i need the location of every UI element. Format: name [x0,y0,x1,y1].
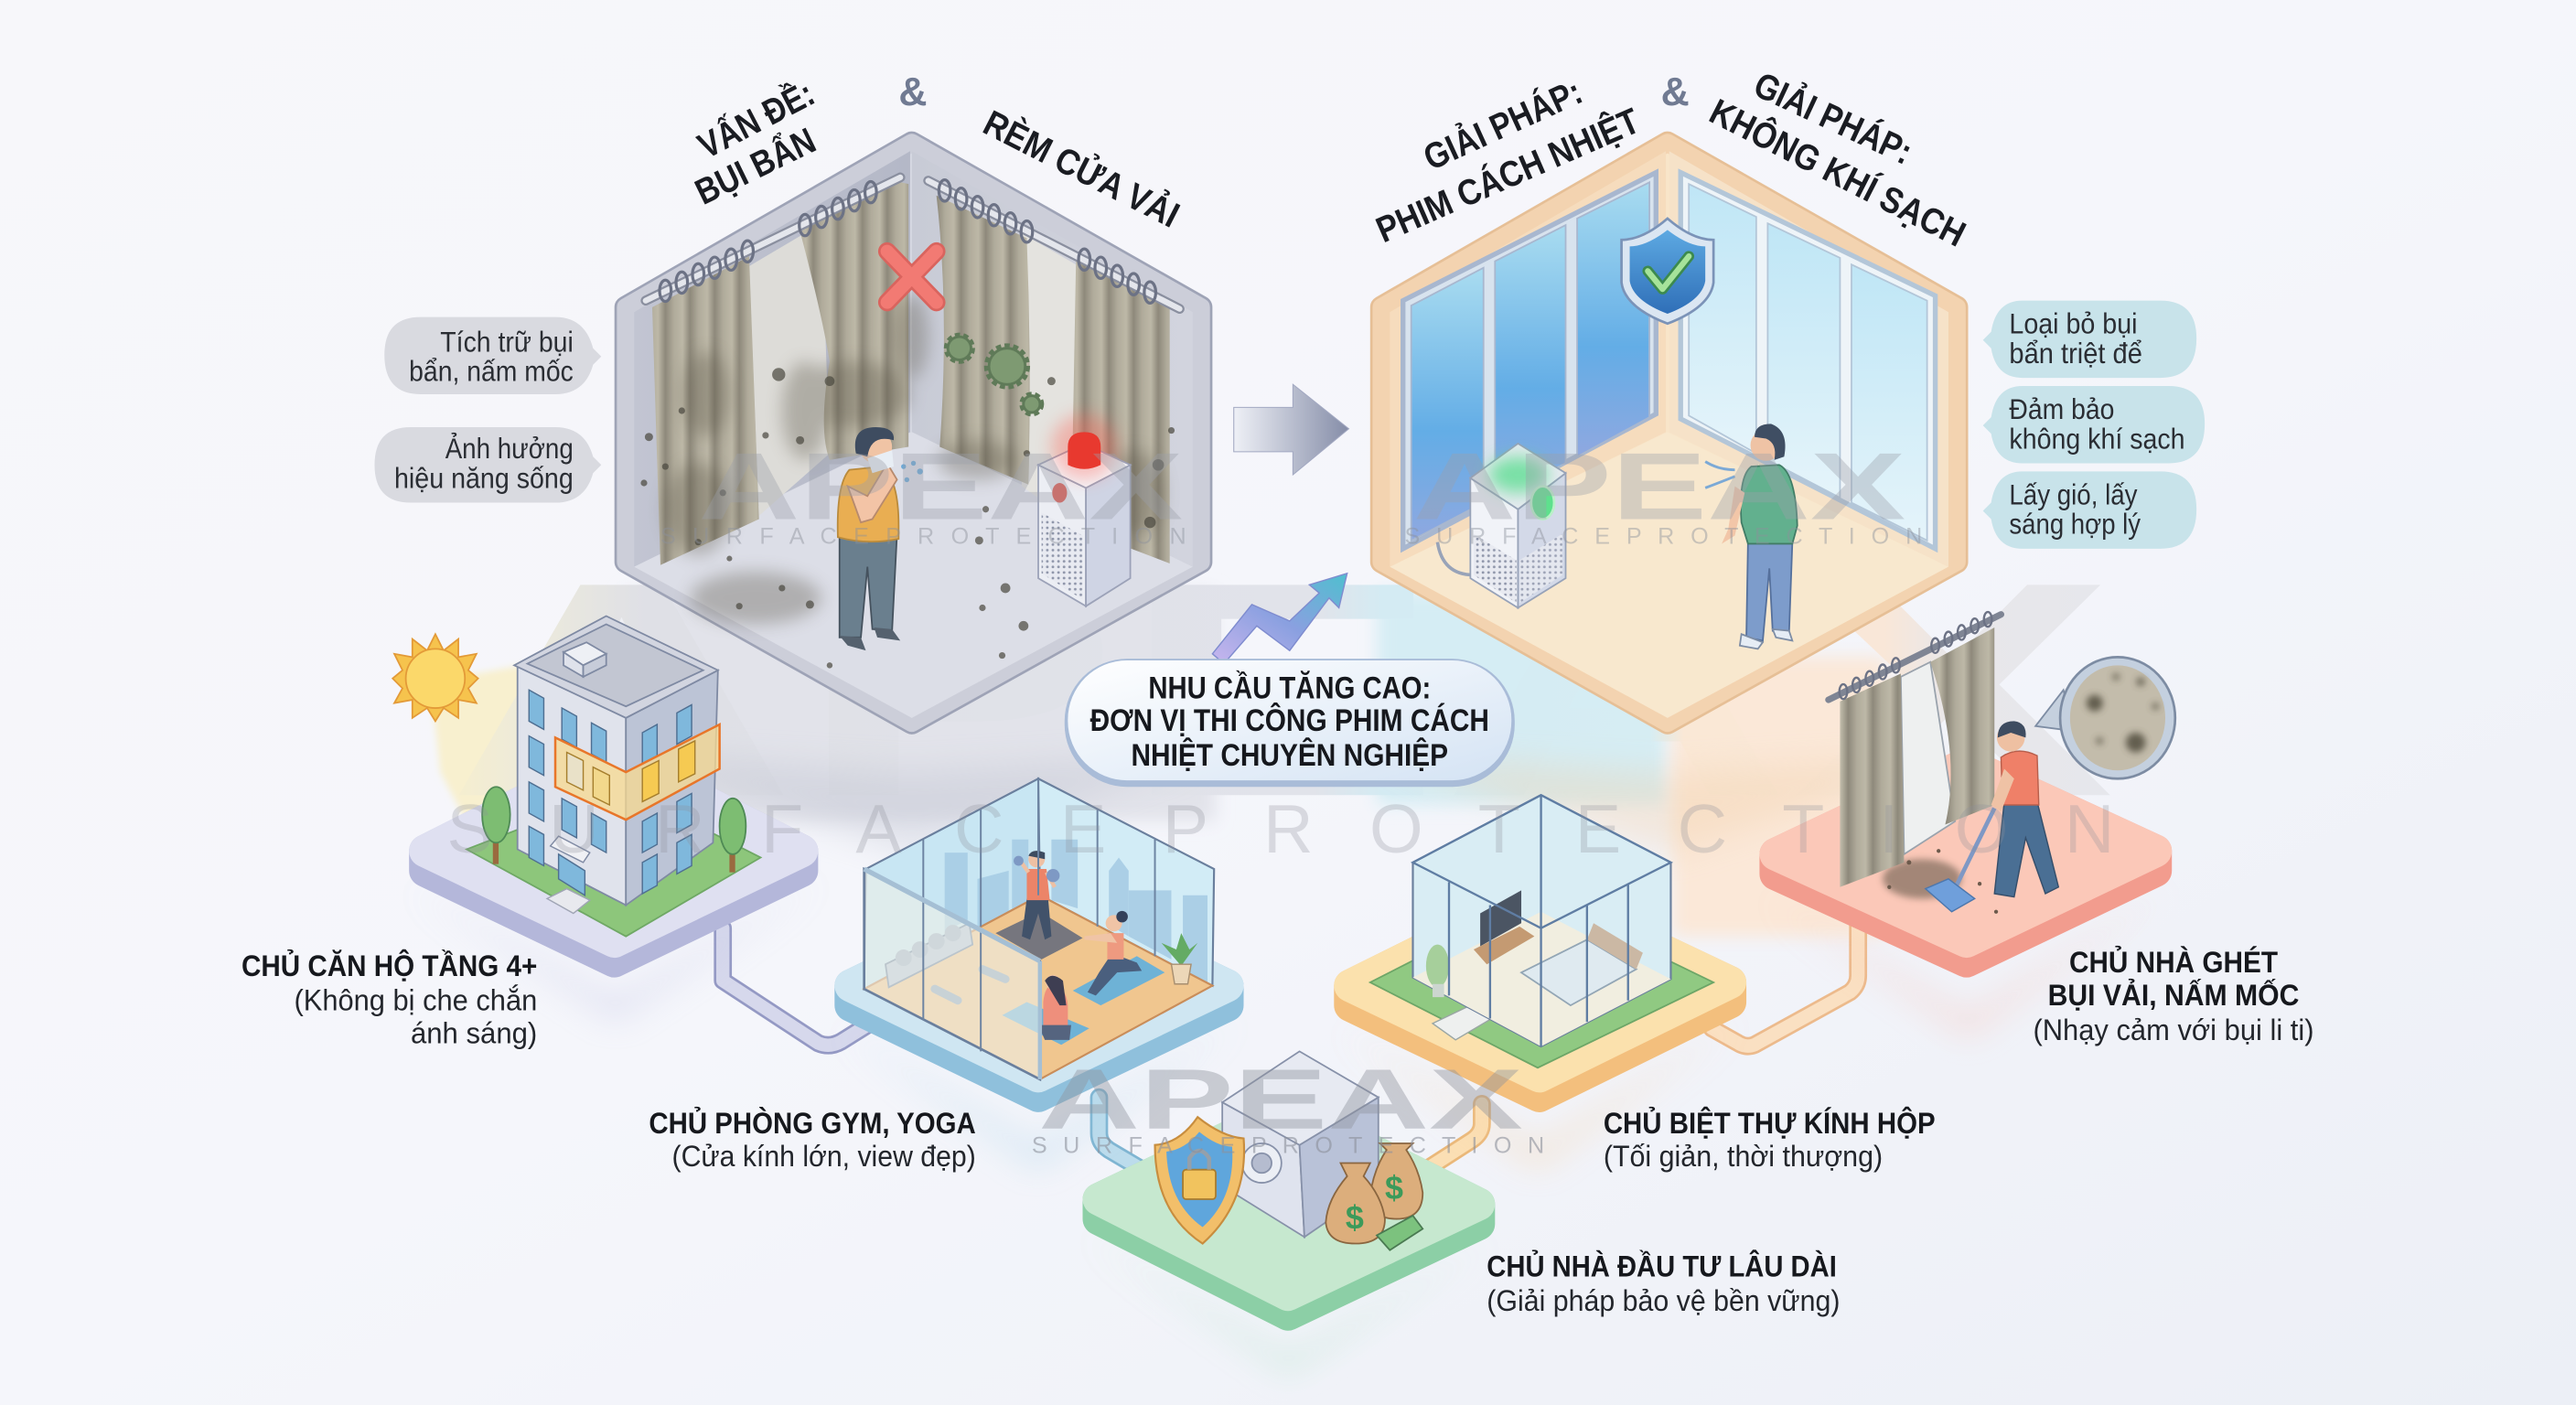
curtain right [1930,627,1994,825]
title: clean air solution: KHÔNG KHÍ SẠCH [1703,91,1972,255]
curtain: right inner [937,196,1030,485]
title: problem dust [689,73,822,213]
platform top [1350,892,1730,1076]
bubble: light and wind: sáng hợp lý [2009,509,2141,541]
safe [1222,1051,1379,1237]
person lunging [1084,911,1142,995]
bubble: quality of life: hiệu năng sống [394,462,574,494]
windows [529,690,692,894]
yoga mat right [1073,956,1165,1005]
bubble: dust storage [384,317,601,394]
person breathing [1722,424,1798,649]
platform top [425,756,801,941]
panel: gym audience [838,778,1240,1166]
title: problem dust: BỤI BẨN [689,120,822,213]
head [859,431,892,463]
title: clean air solution: GIẢI PHÁP: [1748,65,1918,173]
green indicator [1531,487,1554,520]
bubble: dust removal: bẩn triệt để [2009,338,2142,370]
panel: glass villa audience [1339,795,1742,1166]
bubble: dust storage: bẩn, nấm mốc [409,356,574,388]
icon: money bags: $ [1385,1169,1403,1207]
purifier grill [1042,512,1083,600]
panel: apartment audience [392,616,821,1018]
curtain left [1840,673,1904,887]
dumbbells [935,970,1005,1001]
label: dust hater: CHỦ NHÀ GHÉT [2069,945,2278,979]
person with dumbbells [1014,851,1059,939]
bed [1521,923,1643,1005]
label: dust hater: BỤI VẢI, NẤM MỐC [2048,977,2299,1012]
glass cube back [1412,795,1670,1046]
title: fabric curtains: RÈM CỬA VẢI [977,102,1186,236]
dumbbell rack [886,923,972,987]
platform side [851,896,1228,1096]
title: problem dust: VẤN ĐỀ: [692,73,821,166]
clean window right [1680,173,1936,549]
label: apartment owner: ánh sáng) [411,1016,537,1049]
curtain rod left [646,177,900,302]
bubble: light and wind [1983,471,2196,549]
callout: demand: NHU CẦU TĂNG CAO: [1148,670,1431,705]
icon: money bags: $ [1346,1198,1364,1236]
lawn [1370,897,1713,1067]
icon: mold viruses [946,335,1042,414]
small watermarks: S U R F A C E P R O T E C T I O N [660,523,1186,549]
red indicator [1052,483,1067,503]
bubble: quality of life [374,427,601,503]
curtain rod [1829,612,2001,700]
clean air breath [1705,462,1734,488]
icon: gold shield lock [1155,1117,1244,1244]
bubble: dust storage: Tích trữ bụi [440,326,574,358]
colored background glows [431,592,1886,937]
callout: demand [1065,659,1515,787]
connectors between audience platforms [723,920,1858,1176]
highlighted floor band [555,724,720,820]
alarm light [1068,432,1100,469]
title: heat film solution: PHIM CÁCH NHIỆT [1370,101,1646,251]
callout: demand: NHIỆT CHUYÊN NGHIỆP [1131,738,1448,773]
room frame [1381,143,1957,723]
small watermark [1032,1051,1544,1159]
person with mop [1926,721,2058,912]
bubble: clean air: không khí sạch [2009,423,2185,455]
curtain rod right [928,180,1179,309]
device: clean air purifier [1437,444,1566,607]
left wall [1390,151,1666,567]
callout: demand: ĐƠN VỊ THI CÔNG PHIM CÁCH [1090,702,1489,738]
room frame [626,143,1201,723]
bubble: dust removal: Loại bỏ bụi [2009,308,2137,340]
arrow: problem to solution [1234,384,1348,475]
room inner shell [626,143,1201,723]
steps [1433,1005,1492,1040]
interior floor [1412,912,1670,1046]
magnifier: mold detail [2035,657,2175,778]
platform side [1099,1109,1478,1314]
arms [848,463,897,522]
person sitting [1038,975,1071,1040]
bubble: clean air: Đảm bảo [2009,393,2114,425]
icon: shield check [1622,219,1713,324]
grill [1474,534,1517,603]
label: apartment owner: (Không bị che chắn [294,982,537,1016]
platform side [1350,892,1730,1096]
plant [1162,933,1197,984]
right wall [912,151,1193,567]
platform side [1776,764,2155,961]
glass mullions [864,778,1155,1079]
bubble: quality of life: Ảnh hưởng [445,433,574,465]
window left [749,223,830,516]
ampersand left: & [898,70,927,114]
trees [482,787,746,873]
back glass left [864,778,1040,989]
TV [1480,890,1521,946]
glass cube front edges [1412,795,1670,1046]
sneeze droplets [901,461,923,482]
label: villa owner [1604,1105,1936,1173]
small watermarks: S U R F A C E P R O T E C T I O N [1405,523,1922,549]
small watermarks: APEAX [1412,434,1905,541]
bubble: light and wind: Lấy gió, lấy [2009,478,2138,510]
label: villa owner: CHỦ BIỆT THỰ KÍNH HỘP [1604,1105,1936,1140]
title: heat film solution: GIẢI PHÁP: [1418,71,1588,178]
dark mat [995,912,1083,960]
icon: money bags [1326,1143,1422,1250]
label: villa owner: (Tối giản, thời thượng) [1604,1140,1883,1173]
panel: solution room [1372,143,1963,854]
curtain: left outer [652,256,759,565]
label: dust hater [2033,945,2314,1046]
panel: problem room [616,143,1208,854]
label: gym owner [649,1106,976,1173]
ampersand right: & [1661,70,1690,114]
left wall [634,151,910,567]
icon: red X [887,252,937,302]
mask [867,450,894,473]
label: long-term owner: (Giải pháp bảo vệ bền vững) [1487,1284,1840,1317]
mold stains [665,294,1164,624]
big watermark: APEAX: APEAX [446,519,2117,860]
shoes [840,627,900,650]
floor [1390,432,1948,718]
panel: long-term investor [1032,1051,1544,1372]
lit windows [567,741,695,805]
building [514,616,718,906]
green glow top [1488,456,1548,493]
small watermark: APEAX [1038,1051,1523,1147]
skyline [945,840,1208,982]
platform side [425,756,801,961]
icon: sun [392,634,478,721]
platform top [1776,764,2155,941]
panel: dust hater audience [1766,612,2175,1035]
bubble: clean air [1983,386,2205,463]
label: dust hater: (Nhạy cảm với bụi li ti) [2033,1014,2314,1046]
label: gym owner: (Cửa kính lớn, view đẹp) [672,1140,976,1173]
legs [840,534,897,638]
dust specks on floor [1887,849,1998,914]
floor [864,896,1212,1079]
bubble: dust removal [1983,301,2196,378]
person sneezing [838,427,923,650]
curtain: left inner gathered [800,181,908,460]
surface protection big tagline: S U R F A C E P R O T E C T I O N [446,790,2114,867]
room inner shell [1381,143,1957,723]
arrow: growth [1212,574,1347,664]
film window left [1403,173,1656,549]
platform top [1099,1109,1478,1294]
front glass [864,869,1040,1079]
tv console [1474,927,1534,964]
hair [855,427,894,456]
label: long-term owner [1487,1249,1840,1317]
platform top [851,896,1228,1076]
entrance [547,836,590,914]
dust pile [1883,859,1961,898]
window [1901,662,1955,854]
label: apartment owner [242,948,537,1049]
dust specks [640,368,1175,669]
back glass right [1038,778,1214,986]
lawn [467,788,761,937]
label: long-term owner: CHỦ NHÀ ĐẦU TƯ LÂU DÀI [1487,1249,1837,1282]
curtain: right outer [1071,256,1170,563]
floor [634,432,1193,718]
window right [1022,233,1084,526]
label: gym owner: CHỦ PHÒNG GYM, YOGA [649,1106,976,1140]
plant [1426,945,1449,997]
red alarm glow [1051,414,1117,479]
label: apartment owner: CHỦ CĂN HỘ TẦNG 4+ [242,948,537,982]
small watermarks: APEAX [698,434,1183,541]
device: alarm purifier [1038,414,1131,606]
right wall [1669,151,1948,567]
yoga mat front [1003,1003,1089,1045]
shirt [838,467,898,542]
small watermarks [660,434,1922,549]
small watermark: S U R F A C E P R O T E C T I O N [1032,1133,1544,1159]
